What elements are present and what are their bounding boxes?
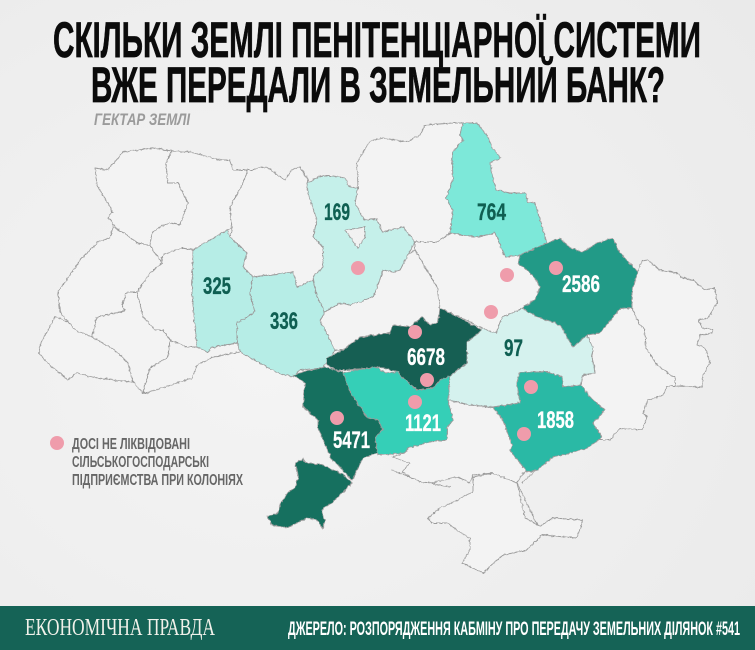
region: Chernihiv: [355, 123, 463, 242]
legend marker: [50, 436, 64, 450]
value: 325: 325: [203, 273, 231, 300]
logo: ЕКОНОМІЧНА ПРАВДА: [25, 615, 215, 641]
legend text: ПІДПРИЄМСТВА ПРИ КОЛОНІЯХ: [72, 472, 243, 489]
region: Poltava: [415, 233, 540, 333]
region: Zaporizhzhia: [493, 372, 605, 472]
region: Zhytomyr: [230, 167, 323, 287]
region: Kherson: [392, 400, 527, 483]
value: 5471: 5471: [333, 427, 370, 454]
subtitle: unit: ГЕКТАР ЗЕМЛІ: [94, 110, 191, 129]
coastline details: [392, 469, 538, 526]
region: Kharkiv: [518, 238, 638, 347]
title: [53, 12, 701, 113]
region: Volyn: [95, 148, 188, 245]
legend text: [72, 436, 243, 489]
legend text: ДОСІ НЕ ЛІКВІДОВАНІ: [72, 436, 190, 453]
regions: [39, 123, 717, 573]
region: Khmelnytskyi: [192, 230, 255, 352]
region: Rivne: [150, 151, 248, 262]
value labels: [203, 199, 600, 454]
region: Ternopil: [137, 248, 197, 347]
value: 169: 169: [324, 199, 350, 226]
region: Vinnytsia: [237, 272, 335, 377]
region: Dnipropetrovsk: [448, 308, 595, 407]
colony markers: [330, 261, 563, 441]
value: 1858: 1858: [537, 407, 574, 434]
region: Odesa: [267, 367, 383, 529]
value: 97: 97: [504, 335, 523, 362]
footer bar: [0, 606, 755, 650]
legend: [50, 436, 243, 489]
value: 1121: 1121: [405, 410, 441, 437]
region: Donetsk: [581, 308, 675, 440]
value: 764: 764: [477, 199, 506, 226]
region: Zakarpattia: [39, 317, 133, 382]
region: Chernivtsi: [143, 340, 240, 393]
value: 6678: 6678: [407, 344, 445, 371]
region: Cherkasy: [320, 250, 440, 350]
region: Kyiv oblast: [307, 176, 415, 312]
region: Lviv: [58, 227, 162, 337]
region: Ivano-Frankivsk: [92, 292, 170, 393]
legend text: СІЛЬСЬКОГОСПОДАРСЬКІ: [72, 454, 209, 471]
region: Sumy: [446, 123, 547, 257]
region: Luhansk: [632, 260, 717, 387]
value: 336: 336: [270, 308, 298, 335]
map of Ukraine: [39, 123, 717, 573]
value: 2586: 2586: [562, 271, 600, 298]
region: Kirovohrad: [327, 308, 482, 390]
region: Mykolaiv: [343, 367, 453, 455]
region: Crimea: [428, 473, 583, 573]
